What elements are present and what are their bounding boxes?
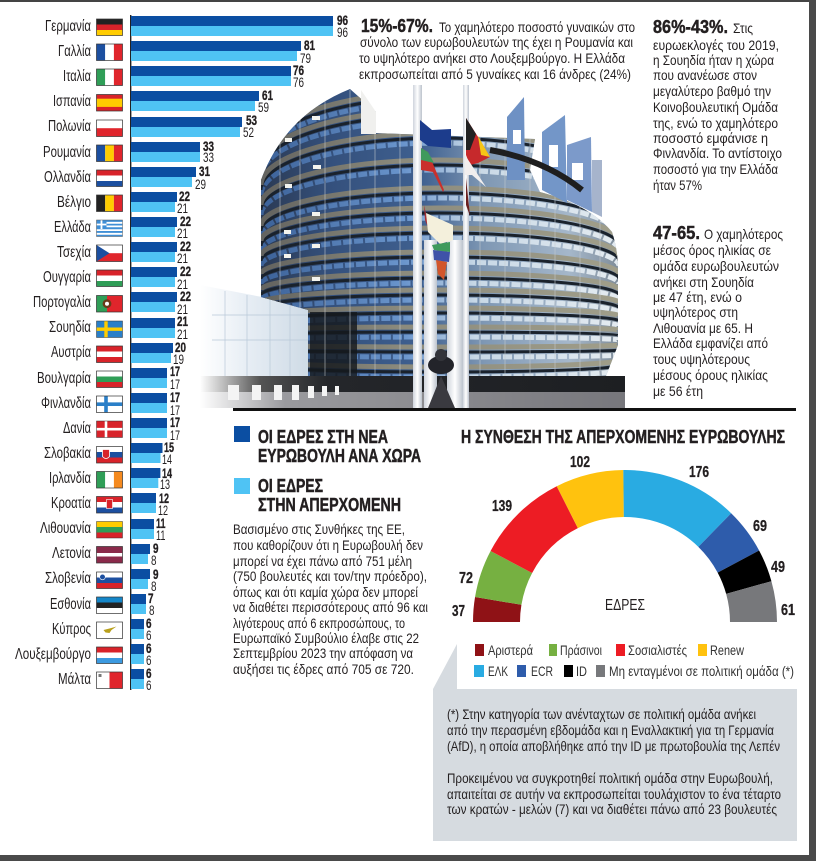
flag: Czechia [96,245,122,262]
flag: Greece [96,220,122,236]
chart legend: Πράσινοι [560,642,602,658]
chart centre label: ΕΔΡΕΣ [605,597,645,614]
text block: 86%-43% [653,16,782,193]
flags on poles [420,118,490,280]
row: Ουγγαρία: Ουγγαρία [43,269,91,286]
row: Γαλλία: 81 [304,37,315,53]
row: Ισπανία: 61 [262,87,273,103]
row: Βέλγιο: 21 [177,200,188,216]
row: Ιταλία [63,62,304,90]
row: Γαλλία [58,37,315,66]
segment: ΕΛΚ 176 [623,470,731,547]
flag: Germany [96,19,122,36]
row: Ελλάδα: Ελλάδα [54,219,91,236]
row: Ιταλία: 76 [293,74,304,90]
text block: 86%-43%: Φινλανδία. Το αντίστοιχο [653,145,782,161]
legend heading: outgoing parliament seats: ΣΤΗΝ ΑΠΕΡΧΟΜΕΝΗ [258,494,401,515]
row: Λουξεμβούργο: 6 [146,652,152,668]
row: Γερμανία: Γερμανία [45,18,91,35]
row: Αυστρία [51,339,186,367]
row: Εσθονία: 7 [148,590,154,606]
photo: European Parliament building [200,85,625,408]
chart legend: Σοσιαλιστές [628,642,687,658]
row: Λιθουανία: 11 [156,515,166,531]
text block: 15%-67%: σύνολο των ευρωβουλευτών της έχει η Ρουμανία και [360,34,633,50]
row: Κροατία [51,490,169,518]
row: Ρουμανία: 33 [203,138,214,154]
row: Σλοβενία: 9 [153,566,159,582]
row: Κύπρος: Κύπρος [52,621,91,638]
flag: Austria [96,346,122,362]
chart legend: Renew [710,642,745,658]
segment: Σοσιαλιστές 139 [491,486,578,573]
segment: ECR 69 [698,513,759,573]
sculpture [428,349,455,408]
row: Λουξεμβούργο: 6 [146,640,152,656]
section divider bar [233,408,796,411]
segment: ID 49 [718,550,771,594]
row: Σλοβενία [45,566,159,594]
row: Ιρλανδία: Ιρλανδία [49,470,91,487]
row: Πορτογαλία: Πορτογαλία [33,294,91,311]
semicircle chart: outgoing parliament [452,454,795,622]
row: Ισπανία: Ισπανία [53,93,91,110]
text block: 47-65: 47-65. [653,222,700,243]
row: Δανία: 17 [170,427,180,443]
flag: Latvia [96,546,122,563]
text block: 47-65: Λιθουανία με 65. Η [653,320,753,336]
row: Ιταλία: 76 [293,62,304,78]
text block: 47-65: υψηλότερος στη [653,304,738,320]
chart legend [474,642,794,679]
row: Ισπανία: 59 [258,99,269,115]
row: Πολωνία: 53 [246,112,257,128]
row: Βουλγαρία [37,363,180,392]
text block: 86%-43%: ποσοστό εμφάνισε η [653,130,768,146]
seat counts: 176 [689,464,709,481]
seat counts: 72 [459,570,473,587]
flag: Italy [96,69,122,86]
flag: Slovakia [96,446,122,463]
flag: Luxembourg [96,647,122,664]
flag: Netherlands [96,170,122,186]
seat counts: 37 [452,603,465,620]
text block: 15%-67% [359,15,635,82]
legend heading: outgoing parliament seats: ΟΙ ΕΔΡΕΣ [258,475,323,496]
text block: 86%-43%: Στις [733,20,753,36]
chart legend: ID [576,663,587,679]
row: Σλοβακία: Σλοβακία [44,445,91,462]
row: Μάλτα [58,665,152,693]
seat counts [452,454,795,620]
row: Βέλγιο: 22 [179,188,190,204]
row: Βουλγαρία: 17 [170,363,180,379]
row: Πολωνία: 52 [243,124,254,140]
text block: 47-65: με 56 έτη [653,383,703,399]
flag: Ireland [96,472,122,488]
row: Ελλάδα: 21 [177,225,188,241]
row: Πορτογαλία: 21 [177,301,188,317]
legend heading: outgoing parliament seats [234,475,401,515]
row: Βέλγιο [57,188,190,216]
text block: 86%-43%: ευρωεκλογές του 2019, [653,37,779,53]
flag: Croatia [96,496,122,513]
seat counts: 69 [753,518,767,535]
text block: 86%-43%: Κοινοβουλευτική Ομάδα [653,99,778,115]
flag: Estonia [96,597,122,614]
row: Πολωνία [48,112,257,140]
row: Τσεχία: 22 [180,238,191,254]
row: Σλοβενία: Σλοβενία [45,570,91,587]
text block: treaty explanation: μπορεί να έχει πάνω από 751 μέλη [233,553,412,569]
chart legend: ΕΛΚ [488,663,508,679]
row: Γαλλία: 79 [300,50,311,66]
row: Γερμανία [45,12,348,40]
roof towers [361,90,602,217]
row: Κροατία: 12 [159,490,169,506]
flag: Malta [96,672,122,688]
row: Ιταλία: Ιταλία [63,68,91,85]
row: Λετονία [52,540,159,568]
row: Μάλτα: Μάλτα [58,671,91,688]
text block: treaty explanation: αυξήσει τις έδρες από 705 σε 720. [233,661,414,677]
flag: Slovenia [96,572,122,588]
seat counts: 102 [570,454,590,471]
row: Φινλανδία: Φινλανδία [41,395,91,412]
row: Πορτογαλία [33,288,191,317]
row: Φινλανδία: 17 [170,402,180,418]
text block: 86%-43%: της, ενώ το χαμηλότερο [653,115,778,131]
chart legend: Αριστερά [488,642,533,658]
text block: 86%-43%: η Σουηδία ήταν η χώρα [653,52,774,68]
bar chart: seats per country [15,12,348,693]
flag: France [96,44,122,60]
row: Τσεχία: 21 [177,250,188,266]
row: Ρουμανία: Ρουμανία [43,144,91,161]
callout: notes panel [433,644,797,841]
flag: Bulgaria [96,371,122,388]
text block: treaty explanation: όπως και ότι καμία χώρα δεν μπορεί [233,584,418,600]
text block: 86%-43%: 86%-43%. [653,16,728,37]
text block: treaty explanation: (750 βουλευτές και τον/την πρόεδρο), [233,568,427,584]
flag: Finland [96,396,122,412]
row: Γαλλία: Γαλλία [58,43,91,60]
text block: treaty explanation: Σεπτεμβρίου 2023 την απόφαση να [233,645,413,661]
flag poles [413,85,469,408]
row: Λετονία: 8 [151,552,157,568]
row: Αυστρία: Αυστρία [51,344,91,361]
flag: Spain [96,94,122,111]
row: Εσθονία: 8 [149,602,155,618]
text block: 86%-43%: που ανανέωσε στον [653,67,757,83]
text block: 86%-43%: μεγαλύτερο βαθμό την [653,83,771,99]
flag: Belgium [96,195,122,212]
row: Σουηδία [49,313,188,342]
row: Λουξεμβούργο [15,640,152,668]
text block: treaty explanation: Βασισμένο στις Συνθήκες της ΕΕ, [233,521,405,537]
segment: Renew 102 [557,470,624,528]
row: Σλοβενία: 8 [151,578,157,594]
row: Ουγγαρία: 22 [180,263,191,279]
text block: 47-65: Ο χαμηλότερος [704,226,783,242]
legend heading: new parliament seats [234,426,421,466]
row: Μάλτα: 6 [146,665,152,681]
seat counts: 139 [492,498,512,515]
legend heading: new parliament seats: ΕΥΡΩΒΟΥΛΗ ΑΝΑ ΧΩΡΑ [258,445,421,466]
flag: Cyprus [96,622,122,638]
flag: Portugal [96,296,122,312]
flag: Poland [96,120,122,136]
text block: 47-65: τους υψηλότερους [653,351,750,367]
row: Αυστρία: 20 [175,339,186,355]
row: Λετονία: Λετονία [52,545,91,562]
row: Σουηδία: 21 [177,326,188,342]
row: Σλοβακία: 14 [162,451,172,467]
segment: Μη εντασσόμενοι 61 [726,581,777,622]
flag: Sweden [96,321,122,338]
row: Ουγγαρία: 21 [177,276,188,292]
flag: Lithuania [96,522,122,538]
row: Βουλγαρία: Βουλγαρία [37,370,91,387]
text block: treaty explanation: να διαθέτει περισσότερους από 96 και [233,599,428,615]
row: Ελλάδα: 22 [180,213,191,229]
row: Φινλανδία [41,389,180,418]
low glass building [200,285,308,376]
chart legend: ECR [531,663,553,679]
row: Φινλανδία: 17 [170,389,180,405]
drum facade [255,85,625,380]
row: Ισπανία [53,87,273,115]
text block: 15%-67%: 15%-67%. [361,15,433,36]
row: Ρουμανία [43,138,214,165]
row: Τσεχία: Τσεχία [57,244,91,261]
row: Βουλγαρία: 17 [170,376,180,392]
row: Κύπρος: 6 [146,615,152,631]
row: Λετονία: 9 [153,540,159,556]
text block: 47-65: με 47 έτη, ενώ ο [653,289,742,305]
text block: 47-65 [653,222,783,399]
flag: Romania [96,145,122,162]
row: Ιρλανδία: 13 [160,476,170,492]
row: Εσθονία [50,590,155,618]
text block: treaty explanation: λιγότερους από 6 εκπροσώπους, το [233,615,405,631]
row: Σλοβακία [44,439,174,467]
row: Πολωνία: Πολωνία [48,118,91,135]
row: Τσεχία [57,238,191,266]
row: Ολλανδία: 29 [195,176,206,192]
row: Ρουμανία: 33 [203,149,214,165]
text block: 15%-67%: Το χαμηλότερο ποσοστό γυναικών στο [439,19,635,35]
text block: 86%-43%: ποσοστό για την Ελλάδα [653,161,778,177]
row: Λιθουανία: 11 [156,527,166,543]
row: Δανία: Δανία [63,420,91,437]
row: Μάλτα: 6 [146,677,152,693]
row: Αυστρία: 19 [173,351,184,367]
flag: Denmark [96,421,122,438]
row: Σουηδία: Σουηδία [49,319,91,336]
text block: 15%-67%: το υψηλότερο ανήκει στο Λουξεμβούργο. Η Ελλάδα [359,50,625,66]
row: Γερμανία: 96 [337,24,348,40]
text block: 15%-67%: εκπροσωπείται από 5 γυναίκες και 16 άνδρες (24%) [359,66,631,82]
text block: treaty explanation [233,521,428,677]
ground floor and plaza [200,376,625,408]
row: Ουγγαρία [43,263,191,292]
row: Γερμανία: 96 [337,12,348,28]
row: Δανία: 17 [170,414,180,430]
text block: 47-65: Ελλάδα εμφανίζει από [653,335,768,351]
row: Λιθουανία [40,515,166,543]
row: Ολλανδία: 31 [199,163,210,179]
text block: 47-65: ομάδα ευρωβουλευτών [653,258,779,274]
segment: Πράσινοι 72 [475,551,532,605]
text block: 47-65: μέσους όρους ηλικίας [653,367,768,383]
row: Ελλάδα [54,213,191,241]
row: Ιρλανδία [49,465,172,492]
row: Κύπρος: 6 [146,627,152,643]
seat counts: 49 [771,559,785,576]
flag: Hungary [96,270,122,286]
row: Σουηδία: 21 [177,313,188,329]
row: Ολλανδία [44,163,210,192]
segment: Αριστερά 37 [473,597,521,622]
row: Κροατία: Κροατία [51,495,91,512]
text block: treaty explanation: Ευρωπαϊκό Συμβούλιο έλαβε στις 22 [233,630,419,646]
row: Ολλανδία: Ολλανδία [44,169,91,186]
row: Κύπρος [52,615,152,643]
row: Λιθουανία: Λιθουανία [40,520,91,537]
callout: notes panel: (*) Στην κατηγορία των ανένταχτων σε πολιτική ομάδα ανήκει [447,706,756,722]
text block: 86%-43%: ήταν 57% [653,177,702,193]
row: Σλοβακία: 15 [164,439,174,455]
row: Πορτογαλία: 22 [180,288,191,304]
text block: 47-65: ανήκει στη Σουηδία [653,274,754,290]
text block: treaty explanation: που καθορίζουν ότι η Ευρωβουλή δεν [233,537,423,553]
legend heading: new parliament seats: ΟΙ ΕΔΡΕΣ ΣΤΗ ΝΕΑ [258,426,388,447]
row: Εσθονία: Εσθονία [50,596,91,613]
text block: 47-65: μέσος όρος ηλικίας σε [653,242,771,258]
chart axis [130,15,131,690]
seat counts: 61 [781,602,795,619]
row: Ιρλανδία: 14 [162,465,172,481]
row: Κροατία: 12 [158,502,168,518]
row: Βέλγιο: Βέλγιο [57,194,91,211]
row: Δανία [63,414,180,443]
row: Λουξεμβούργο: Λουξεμβούργο [15,646,91,663]
